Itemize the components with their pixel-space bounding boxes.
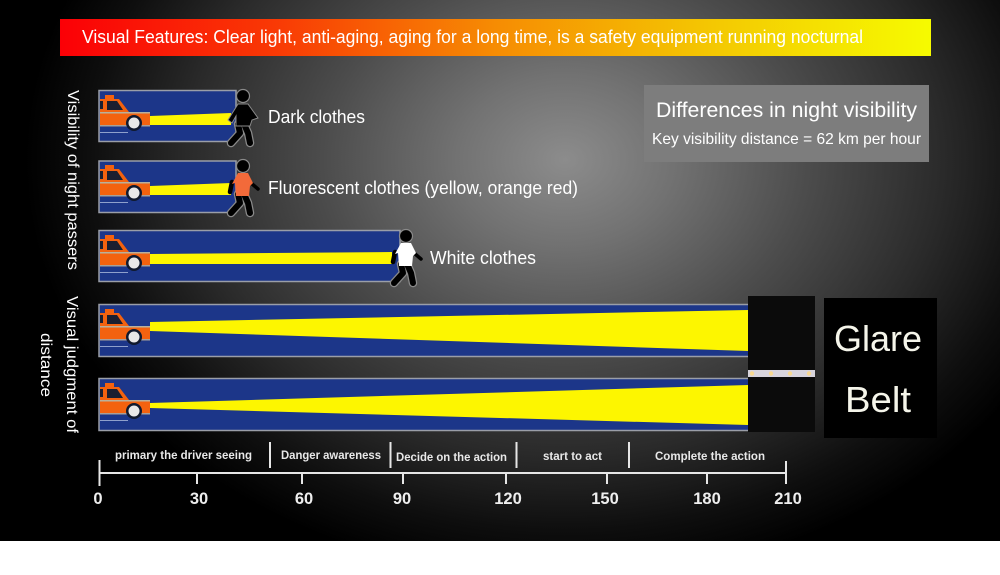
callout: differences in night visibility [644,85,929,162]
reaction stage labels: Decide on the action [396,450,507,464]
row: fluorescent clothes [99,160,578,213]
glare belt label: Glare [834,318,922,359]
row: white clothes [99,230,536,283]
pedestrian: dark clothes [228,90,258,143]
reaction stage labels [115,448,765,464]
reaction stage labels: primary the driver seeing [115,448,252,462]
distance axis [99,442,787,486]
label: White clothes [430,248,536,268]
title banner [60,19,931,56]
vertical label: visual judgment of distance: Visual judgment of [63,296,80,434]
reaction stage labels: start to act [543,449,602,463]
axis numbers: 30 [190,490,208,508]
axis numbers: 90 [393,490,411,508]
label: Dark clothes [268,107,365,127]
reaction stage labels: Danger awareness [281,448,381,462]
callout: differences in night visibility: Differences in night visibility [656,99,918,122]
axis numbers: 60 [295,490,313,508]
pedestrian: orange clothes [230,160,258,213]
axis numbers [93,490,802,508]
axis numbers: 120 [494,490,522,508]
distance bar 2 [99,378,749,430]
row: dark clothes [99,90,365,143]
pedestrian: white clothes [393,230,421,283]
vertical label: visual judgment of distance [37,296,80,434]
axis numbers: 210 [774,490,802,508]
distance bar 1 [99,304,749,356]
axis numbers: 0 [93,490,103,508]
glare belt label: Belt [845,379,911,420]
axis numbers: 150 [591,490,619,508]
glare belt label [824,298,937,438]
axis numbers: 180 [693,490,721,508]
label: Fluorescent clothes (yellow, orange red) [268,178,578,198]
title banner: Visual Features: Clear light, anti-aging, aging for a long time, is a safety equipment running nocturnal [82,27,863,47]
callout: differences in night visibility: Key visibility distance = 62 km per hour [652,131,922,148]
glare belt swatch [748,296,815,432]
vertical label: visual judgment of distance: distance [37,333,54,397]
reaction stage labels: Complete the action [655,449,765,463]
vertical label: visibility of night passers: Visibility of night passers [64,90,81,270]
